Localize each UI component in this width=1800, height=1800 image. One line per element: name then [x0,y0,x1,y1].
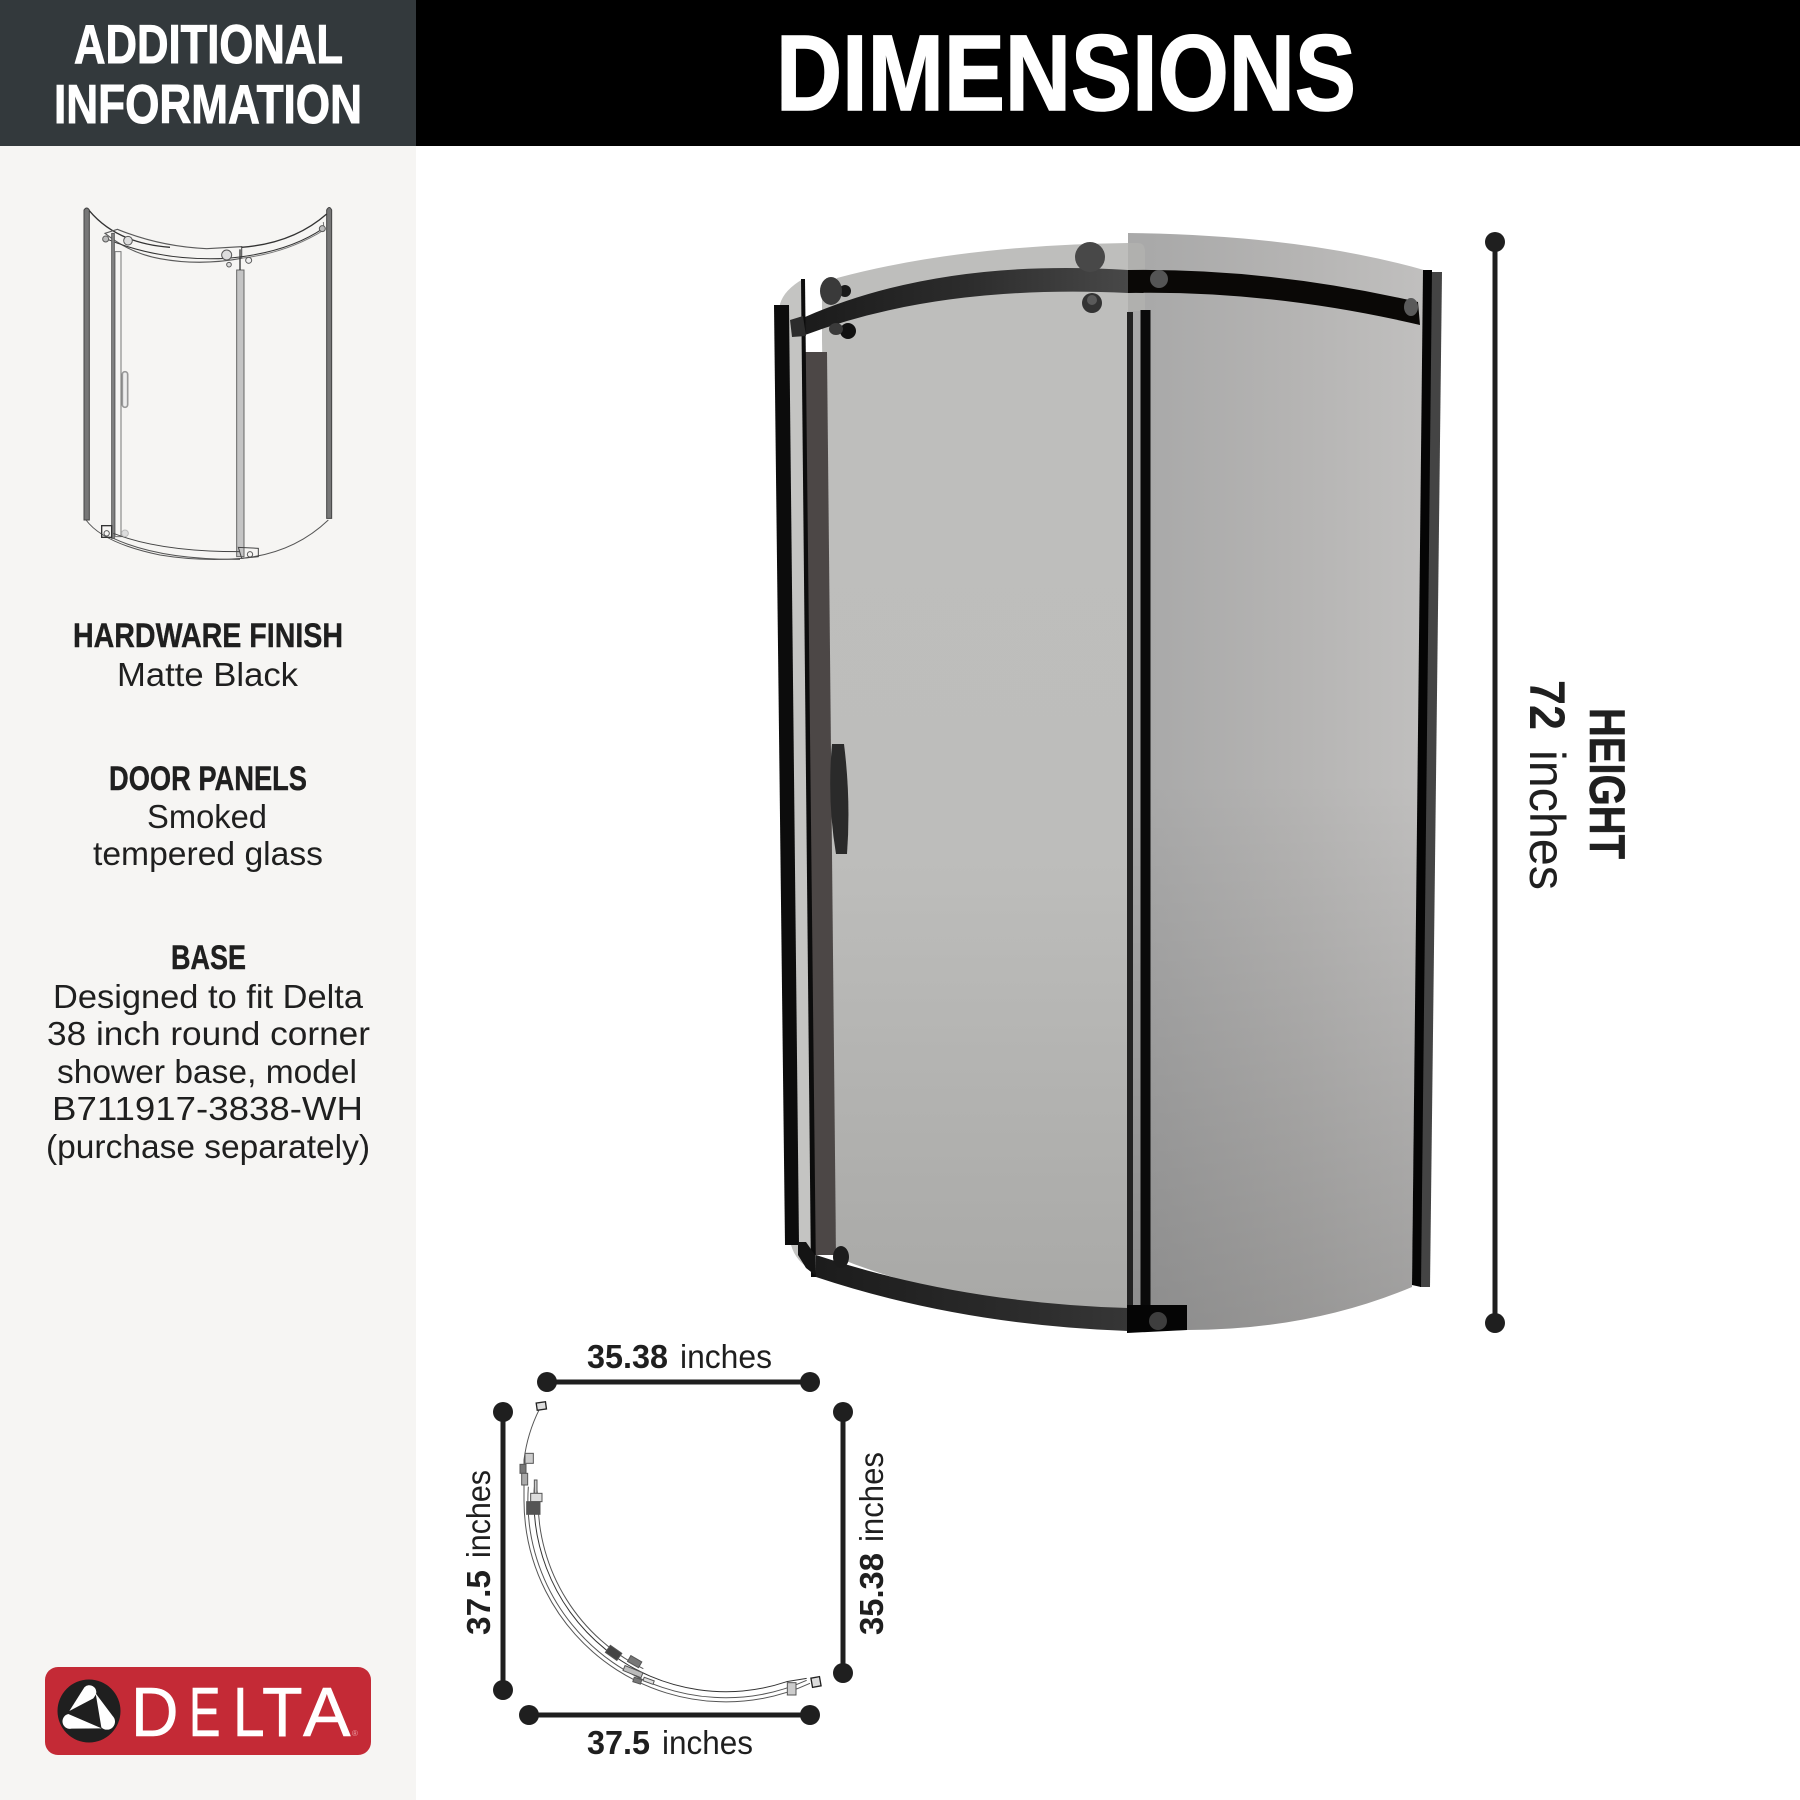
text block: door panels [93,760,323,872]
dimension: height: 72 [1519,680,1575,730]
text block: door panels: DOOR PANELS [109,760,307,798]
logo: Delta: ® [352,1729,358,1738]
rollers [790,242,1418,1275]
logo: Delta [45,1667,371,1755]
right post [1412,270,1442,1287]
dimension: bottom width: inches [662,1724,753,1761]
text block: base: (purchase separately) [46,1128,370,1165]
left fixed glass sliver [780,279,812,1270]
dimension: top width: 35.38 [587,1338,668,1375]
text block: base: B711917-3838-WH [52,1090,363,1127]
dimension: right depth: inches [853,1452,890,1542]
text block: base: Designed to fit Delta [53,978,364,1015]
text block: door panels: tempered glass [93,835,323,872]
bottom bracket [1127,1305,1187,1333]
plan view curved track [520,1402,821,1702]
icon: shower enclosure line drawing [84,207,332,559]
left post [774,305,799,1245]
dimension: bottom width: 37.5 [587,1724,650,1761]
dimension: right depth: 35.38 [853,1553,890,1635]
text block: base: shower base, model [57,1053,357,1090]
heading: additional information: INFORMATION [54,73,362,135]
dimension: height: inches [1519,750,1575,890]
dimension: left depth [460,1402,513,1700]
heading: dimensions [416,0,1800,146]
logo: Delta: D [131,1673,178,1751]
door edge line [801,279,816,1277]
heading: additional information [0,0,416,146]
heading: additional information: ADDITIONAL [74,13,343,75]
dimension: right depth [833,1402,890,1683]
text block: hardware finish: Matte Black [117,656,299,693]
overlap highlight [1128,243,1145,311]
illustration: smoked glass shower enclosure [774,233,1442,1333]
right fixed glass panel [1128,233,1424,1332]
text block: hardware finish [73,617,343,693]
panel: additional information sidebar [0,0,416,1800]
dimension: top width: inches [680,1338,772,1375]
dimension: bottom width [519,1705,820,1761]
text block: door panels: Smoked [147,798,267,835]
door handle [830,744,848,854]
text block: base [46,939,370,1165]
dimension: left depth: inches [460,1470,497,1558]
text block: hardware finish: HARDWARE FINISH [73,617,343,655]
dimension: top width [537,1338,820,1392]
text block: base: 38 inch round corner [47,1015,370,1052]
sliding door glass [822,243,1128,1310]
top rail [805,268,1420,335]
centre door stiles [1127,310,1150,1312]
dimension: height [1485,232,1635,1333]
logo: Delta: T [262,1673,303,1751]
text block: base: BASE [171,939,246,977]
plan view diagram [460,1338,890,1761]
logo: Delta: E [189,1673,220,1751]
logo: Delta: A [303,1673,351,1751]
dimension: left depth: 37.5 [460,1570,497,1635]
logo: Delta: L [233,1673,265,1751]
bottom rail [816,1255,1128,1331]
heading: dimensions: DIMENSIONS [776,12,1356,133]
dimension: height: HEIGHT [1579,708,1635,859]
door edge strip [803,352,836,1255]
